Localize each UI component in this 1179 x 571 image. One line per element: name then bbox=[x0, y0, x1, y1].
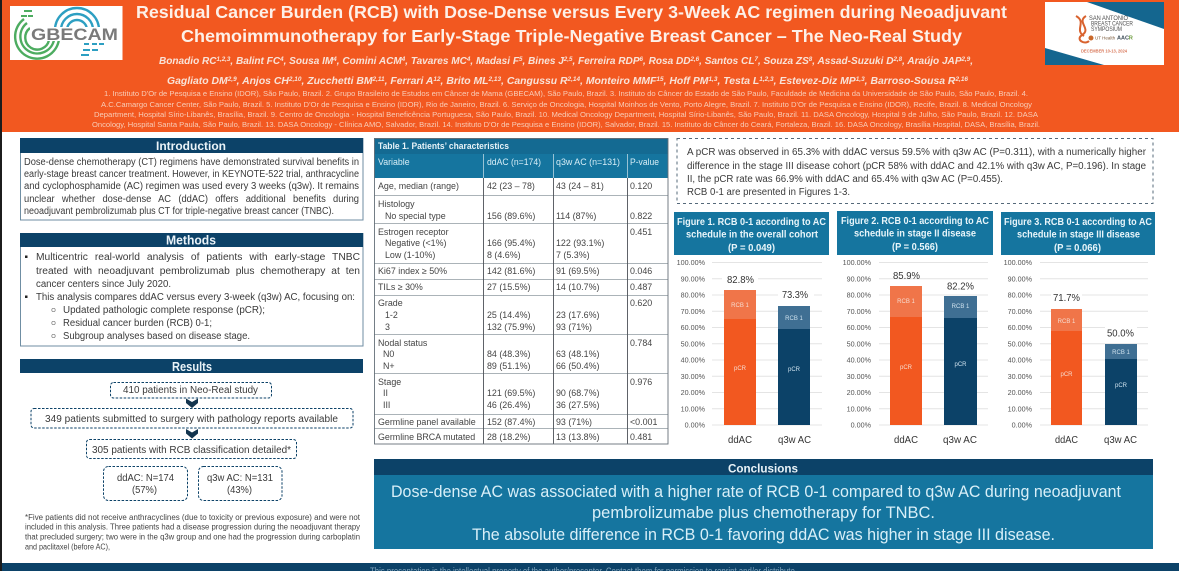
table body: Ki67 index ≥ 50% bbox=[378, 266, 447, 276]
y axis labels: 30.00% bbox=[847, 372, 872, 381]
figure 3 heading: (P = 0.066) bbox=[1054, 242, 1101, 254]
authors: 2,14 bbox=[567, 76, 580, 83]
bar: ddAC overall bbox=[722, 273, 758, 446]
y axis labels: 50.00% bbox=[681, 339, 706, 348]
table body: 43 (24 – 81) bbox=[556, 181, 604, 191]
authors: 2,9 bbox=[961, 56, 971, 63]
table body: 42 (23 – 78) bbox=[487, 181, 535, 191]
figure 3 heading bbox=[1001, 212, 1155, 255]
y axis labels: 40.00% bbox=[1008, 356, 1033, 364]
footer bar bbox=[2, 563, 1179, 571]
table body bbox=[378, 181, 657, 442]
figure 2 heading: (P = 0.566) bbox=[892, 241, 938, 253]
y axis labels: 100.00% bbox=[677, 258, 706, 267]
authors: 6 bbox=[640, 56, 643, 63]
panel: introduction bbox=[20, 138, 363, 220]
panel: conclusions bbox=[374, 459, 1153, 549]
bar: q3w AC stage III: RCB 1 bbox=[1112, 350, 1130, 356]
text block: introduction: unclear whether dose-dense AC (ddAC) offers additional benefits during bbox=[24, 194, 359, 205]
table body: 27 (15.5%) bbox=[487, 282, 530, 292]
bar: q3w AC stage III bbox=[1104, 327, 1137, 446]
table body: 7 (5.3%) bbox=[556, 250, 590, 260]
bar: q3w AC overall: pCR bbox=[788, 367, 801, 373]
y axis labels: 90.00% bbox=[681, 274, 706, 283]
arrow: chevron 1 bbox=[186, 398, 198, 408]
authors: 4 bbox=[466, 56, 471, 63]
flow box: ddAC bbox=[104, 466, 188, 500]
table body: 93 (71%) bbox=[556, 417, 592, 427]
y axis labels: 30.00% bbox=[1008, 372, 1033, 381]
flow box: 349 patients: 349 patients submitted to surgery with pathology reports available bbox=[45, 414, 338, 425]
y axis labels: 60.00% bbox=[1008, 323, 1033, 332]
affiliations bbox=[92, 89, 1040, 129]
bar: q3w AC stage II bbox=[943, 280, 977, 446]
table body: 91 (69.5%) bbox=[556, 266, 599, 276]
y axis labels: 100.00% bbox=[1004, 258, 1033, 267]
table body: 8 (4.6%) bbox=[487, 250, 521, 260]
panel: methods bbox=[20, 233, 363, 346]
table body: Stage bbox=[378, 377, 401, 387]
bar: q3w AC stage II: RCB 1 bbox=[952, 304, 970, 310]
bar: q3w AC stage II: pCR bbox=[954, 362, 967, 368]
authors: , bbox=[969, 55, 973, 67]
y axis labels: 90.00% bbox=[1008, 274, 1033, 283]
text block: methods list: treated with neoadjuvant pembrolizumab plus chemotherapy at ten bbox=[36, 266, 360, 277]
title: Residual Cancer Burden (RCB) with Dose-Dense versus Every 3-Week AC regimen during Neoadjuvant bbox=[136, 2, 1007, 22]
y axis labels: 100.00% bbox=[843, 258, 872, 267]
table body: Negative (<1%) bbox=[385, 238, 446, 248]
arrow: chevron 2 bbox=[186, 429, 198, 438]
logo: GBECAM bbox=[10, 6, 122, 60]
table body: 0.120 bbox=[630, 181, 652, 191]
table body: 36 (27.5%) bbox=[556, 400, 599, 410]
flow box: 349 patients bbox=[31, 408, 353, 428]
text block: introduction: Dose-dense chemotherapy (CT) regimens have demonstrated survival benefits in bbox=[24, 157, 359, 168]
flow box: q3w AC: (43%) bbox=[227, 485, 252, 496]
bar: ddAC overall: 82.8% bbox=[727, 274, 754, 286]
authors: 2,6 bbox=[690, 56, 700, 63]
table body: <0.001 bbox=[630, 417, 657, 427]
footnote: included in this analysis. Three patients had a disease progression during the neoadjuvant therapy bbox=[25, 522, 360, 532]
authors: 2,9 bbox=[227, 76, 237, 83]
bar: ddAC stage III bbox=[1051, 291, 1082, 446]
authors: , Madasi F bbox=[469, 55, 520, 67]
text block: methods list: Residual cancer burden (RCB) 0-1; bbox=[63, 318, 212, 329]
text block: conclusions: Dose-dense AC was associated with a higher rate of RCB 0-1 compared to q3w AC during neoadjuvant bbox=[391, 482, 1121, 501]
authors: , Comini ACM bbox=[336, 55, 402, 67]
table body: 1-2 bbox=[385, 310, 398, 320]
authors: , Anjos CH bbox=[236, 75, 289, 87]
table body: 13 (13.8%) bbox=[556, 432, 599, 442]
authors: , Brito ML bbox=[440, 75, 489, 87]
table body: 142 (81.6%) bbox=[487, 266, 535, 276]
y axis labels: 90.00% bbox=[847, 274, 872, 283]
y axis labels: 20.00% bbox=[1008, 388, 1033, 397]
authors: , Tavares MC bbox=[404, 55, 467, 67]
bar: ddAC stage III: 71.7% bbox=[1053, 292, 1080, 304]
y axis labels: 0.00% bbox=[685, 420, 706, 430]
authors: 4 bbox=[401, 56, 406, 63]
heading: introduction: Introduction bbox=[156, 139, 226, 153]
title: Chemoimmunotherapy for Early-Stage Triple-Negative Breast Cancer – The Neo-Real Study bbox=[181, 26, 962, 46]
flow box: 410 patients: 410 patients in Neo-Real study bbox=[123, 385, 258, 396]
table body: Grade bbox=[378, 298, 403, 308]
authors: 2,13 bbox=[488, 76, 501, 83]
authors: , Bines J bbox=[521, 55, 565, 67]
authors: , Estevez-Diz MP bbox=[773, 75, 857, 87]
y axis labels bbox=[1004, 258, 1033, 430]
text block: introduction: and cyclophosphamide (AC) regimen was used every 3 weeks (q3w). It remains bbox=[24, 181, 359, 192]
authors bbox=[159, 55, 973, 87]
table body: 0.487 bbox=[630, 282, 652, 292]
authors: , Sousa IM bbox=[283, 55, 334, 67]
table body: 93 (71%) bbox=[556, 322, 592, 332]
logo: San Antonio Breast Cancer Symposium: SYMPOSIUM bbox=[1091, 27, 1122, 33]
affiliations: Department, Hospital Sírio-Libanês, Brasília, Brazil. 9. Centro de Oncologia - Hospital Beneficência Portuguesa, São Paulo, Brazil. 10. Medical Oncology Department, Hospital Sírio-Libanês, São Paulo, Brazil. 11. DASA Oncology, Hospital 9 de Julho, São Paulo, Brazil. 12. DASA bbox=[94, 110, 1038, 119]
logo: San Antonio Breast Cancer Symposium: UT Health bbox=[1095, 36, 1116, 40]
logo: San Antonio Breast Cancer Symposium: BREAST CANCER bbox=[1091, 22, 1134, 28]
table body: 114 (87%) bbox=[556, 211, 596, 221]
text block: methods list: Subgroup analyses based on disease stage. bbox=[63, 331, 250, 342]
table body: Germline panel available bbox=[378, 417, 476, 427]
bar: ddAC stage II bbox=[890, 270, 922, 446]
y axis labels: 40.00% bbox=[681, 356, 706, 364]
footnote bbox=[25, 513, 361, 552]
authors: 4 bbox=[332, 56, 337, 63]
text block: introduction: early-stage breast cancer treatment. However, in KEYNOTE-522 trial, anthracycline bbox=[24, 169, 359, 180]
table header row: P-value bbox=[630, 157, 659, 167]
table body: III bbox=[383, 400, 390, 410]
y axis labels: 70.00% bbox=[681, 307, 706, 316]
table body: 0.784 bbox=[630, 338, 652, 348]
flow box: 410 patients bbox=[110, 382, 272, 398]
text block: pCR summary: A pCR was observed in 65.3% with ddAC versus 59.5% with q3w AC (P=0.311), with a numerically higher bbox=[687, 147, 1147, 158]
table body: 0.822 bbox=[630, 211, 652, 221]
heading: methods: Methods bbox=[166, 234, 216, 248]
authors: , Cangussu R bbox=[500, 75, 568, 87]
authors: , Monteiro MMF bbox=[579, 75, 657, 87]
y axis labels bbox=[843, 258, 872, 430]
flow box: 305 patients: 305 patients with RCB classification detailed* bbox=[92, 445, 291, 456]
table body: 0.976 bbox=[630, 377, 652, 387]
table body: 84 (48.3%) bbox=[487, 349, 530, 359]
authors: , Rosa DD bbox=[642, 55, 691, 67]
table body: 0.451 bbox=[630, 227, 652, 237]
table body: II bbox=[383, 388, 388, 398]
bar: q3w AC overall: RCB 1 bbox=[785, 316, 803, 322]
authors: 8 bbox=[809, 56, 813, 63]
text block: methods list: This analysis compares ddAC versus every 3-week (q3w) AC, focusing on: bbox=[36, 292, 355, 303]
text block: introduction: neoadjuvant pembrolizumab plus CT for triple-negative breast cancer (TNBC). bbox=[24, 206, 334, 217]
text block: pCR summary: difference in the stage III disease cohort (pCR 58% with ddAC and 42.1% with q3w AC, P=0.196). In stage bbox=[687, 161, 1146, 172]
y axis labels: 0.00% bbox=[851, 420, 872, 430]
authors: , Hoff PM bbox=[663, 75, 709, 87]
bar: q3w AC overall: 73.3% bbox=[782, 289, 808, 301]
text block: pCR summary: II, the pCR rate was 66.9% with ddAC and 65.4% with q3w AC (P=0.455). bbox=[687, 174, 1003, 185]
table body: 122 (93.1%) bbox=[556, 238, 604, 248]
table body: 0.481 bbox=[630, 432, 652, 442]
bar: q3w AC overall bbox=[778, 288, 814, 446]
table body: 156 (89.6%) bbox=[487, 211, 535, 221]
table body: 121 (69.5%) bbox=[487, 388, 535, 398]
authors: 2,5 bbox=[563, 56, 573, 63]
bar: ddAC stage II: ddAC bbox=[894, 434, 918, 446]
text block: methods list bbox=[25, 252, 360, 342]
table body: 0.620 bbox=[630, 298, 652, 308]
y axis labels: 40.00% bbox=[847, 356, 872, 364]
flow box: q3w AC: q3w AC: N=131 bbox=[207, 473, 273, 484]
authors: , Assad-Suzuki D bbox=[811, 55, 894, 67]
authors: , Ferreira RDP bbox=[572, 55, 640, 67]
bar: ddAC stage II: pCR bbox=[900, 365, 913, 371]
chart: figure 1 overall cohort bbox=[674, 212, 829, 446]
table body: 66 (50.4%) bbox=[556, 361, 599, 371]
table body: Age, median (range) bbox=[378, 181, 459, 191]
table body: 152 (87.4%) bbox=[487, 417, 535, 427]
affiliations: A.C.Camargo Cancer Center, São Paulo, Brazil. 5. Instituto D'Or de Pesquisa e Ensino (IDOR), Rio de Janeiro, Brazil. 6. Serviço de Oncologia, Hospital Moinhos de Vento, Porto Alegre, Brazil. 7. Instituto D'Or de Pesquisa e Ensino (IDOR), Recife, Brazil. 8. Medical Oncology bbox=[101, 100, 1032, 109]
y axis labels: 60.00% bbox=[847, 323, 872, 332]
panel: results bbox=[20, 359, 363, 552]
y axis labels: 50.00% bbox=[1008, 339, 1033, 348]
bar: q3w AC stage III: q3w AC bbox=[1104, 434, 1137, 446]
figure 1 heading: Figure 1. RCB 0-1 according to AC bbox=[677, 216, 826, 228]
bar: ddAC stage III: RCB 1 bbox=[1058, 319, 1076, 325]
logo: San Antonio Breast Cancer Symposium: AACR bbox=[1117, 36, 1133, 42]
panel: header banner bbox=[2, 0, 1179, 132]
y axis labels: 30.00% bbox=[681, 372, 706, 381]
authors: , Testa L bbox=[716, 75, 759, 87]
bar: q3w AC stage II: 82.2% bbox=[947, 280, 974, 292]
bar: q3w AC overall: q3w AC bbox=[778, 434, 811, 446]
logo: San Antonio Breast Cancer Symposium: DECEMBER 10-13, 2024 bbox=[1081, 48, 1127, 54]
y axis labels: 10.00% bbox=[681, 404, 706, 413]
table body: 89 (51.1%) bbox=[487, 361, 530, 371]
y axis labels: 70.00% bbox=[847, 307, 872, 316]
authors: 2,8 bbox=[893, 56, 902, 63]
y axis labels: 20.00% bbox=[681, 388, 706, 397]
table body: TILs ≥ 30% bbox=[378, 282, 423, 292]
bar: q3w AC stage III: 50.0% bbox=[1107, 328, 1134, 340]
text block: methods list: Multicentric real-world analysis of patients with early-stage TNBC bbox=[36, 252, 360, 263]
text block: conclusions: The absolute difference in RCB 0-1 favoring ddAC was higher in stage III disease. bbox=[472, 525, 1055, 544]
bar: ddAC stage II: 85.9% bbox=[893, 270, 920, 282]
text block: pCR summary: RCB 0-1 are presented in Figures 1-3. bbox=[687, 187, 850, 198]
table: patients' characteristics bbox=[374, 138, 668, 444]
flow box: ddAC: ddAC: N=174 bbox=[117, 473, 174, 484]
authors: 15 bbox=[656, 76, 664, 83]
table body: 14 (10.7%) bbox=[556, 282, 599, 292]
y axis labels: 80.00% bbox=[847, 290, 872, 300]
chart: figure 3 stage III bbox=[1001, 212, 1155, 446]
footnote: that precluded surgery; two were in the q3w group and one had the progression during carboplatin bbox=[25, 532, 360, 542]
table header row: ddAC (n=174) bbox=[487, 157, 541, 167]
table body: 63 (48.1%) bbox=[556, 349, 599, 359]
text block: introduction bbox=[24, 157, 359, 217]
footnote: *Five patients did not receive anthracyclines (due to toxicity or previous exposure) and were not bbox=[25, 513, 361, 522]
text block: methods list: cancer centers since July 2020. bbox=[36, 279, 171, 290]
y axis labels: 20.00% bbox=[847, 388, 872, 397]
table body: N0 bbox=[383, 349, 394, 359]
authors: , Araújo JAP bbox=[901, 55, 962, 67]
affiliations: Oncology, Hospital Santa Paula, São Paulo, Brazil. 13. DASA Oncology - Clínica AMO, Salvador, Brazil. 14. Instituto D'Or de Pesquisa e Ensino (IDOR), Salvador, Brazil. 15. Instituto do Câncer do Ceará, Fortaleza, Brazil. 16. DASA Oncology, Brasília Hospital, DASA, Brasília, Brazil. bbox=[92, 120, 1040, 129]
table title: Table 1. Patients’ characteristics bbox=[378, 141, 509, 151]
figure 2 heading: Figure 2. RCB 0-1 according to AC bbox=[841, 215, 989, 227]
bar: q3w AC stage II: q3w AC bbox=[943, 434, 977, 446]
text block: conclusions bbox=[391, 482, 1121, 544]
bar: ddAC overall: pCR bbox=[734, 366, 747, 372]
table header row bbox=[378, 157, 659, 167]
flow box: q3w AC bbox=[198, 466, 282, 500]
text block: pCR summary bbox=[677, 138, 1153, 204]
table body: 132 (75.9%) bbox=[487, 322, 535, 332]
figure 1 heading bbox=[674, 212, 829, 255]
authors: 2,16 bbox=[954, 76, 968, 83]
figure 1 heading: (P = 0.049) bbox=[728, 242, 775, 254]
table body: 28 (18.2%) bbox=[487, 432, 530, 442]
bar: ddAC stage II: RCB 1 bbox=[897, 299, 915, 305]
logo: San Antonio Breast Cancer Symposium: SAN ANTONIO bbox=[1089, 16, 1128, 22]
table body: Estrogen receptor bbox=[378, 227, 449, 237]
table header row: Variable bbox=[378, 157, 410, 167]
authors: 1,2,3 bbox=[759, 76, 774, 83]
table body: No special type bbox=[385, 211, 446, 221]
y axis labels: 50.00% bbox=[847, 339, 872, 348]
authors: 4 bbox=[279, 56, 284, 63]
authors: , Zucchetti BM bbox=[300, 75, 373, 87]
authors: 1,3 bbox=[856, 76, 865, 83]
authors: , Barroso-Sousa R bbox=[864, 75, 956, 87]
y axis labels: 70.00% bbox=[1008, 307, 1033, 316]
logo: San Antonio Breast Cancer Symposium bbox=[1045, 2, 1164, 65]
authors: 7 bbox=[754, 56, 758, 63]
authors: 12 bbox=[433, 76, 441, 83]
chart: figure 2 stage II bbox=[837, 211, 993, 446]
heading: results: Results bbox=[172, 360, 212, 374]
text block: conclusions: pembrolizumabe plus chemotherapy for TNBC. bbox=[592, 503, 935, 522]
authors: , Souza ZS bbox=[757, 55, 809, 67]
table body: 3 bbox=[385, 322, 390, 332]
heading: conclusions: Conclusions bbox=[728, 462, 798, 476]
authors: Bonadio RC bbox=[159, 55, 219, 67]
table body: 23 (17.6%) bbox=[556, 310, 599, 320]
authors: , Ferrari A bbox=[384, 75, 433, 87]
text block: methods list: Updated pathologic complete response (pCR); bbox=[63, 305, 265, 316]
figure 1 heading: schedule in the overall cohort bbox=[686, 228, 818, 240]
table body: Histology bbox=[378, 199, 415, 209]
figure 3 heading: Figure 3. RCB 0-1 according to AC bbox=[1004, 216, 1152, 228]
title bbox=[136, 2, 1007, 46]
flow box: ddAC: (57%) bbox=[132, 485, 157, 496]
figure 2 heading bbox=[837, 211, 993, 255]
y axis labels: 10.00% bbox=[847, 404, 872, 413]
bar: ddAC overall: RCB 1 bbox=[731, 303, 749, 309]
figure 2 heading: schedule in stage II disease bbox=[854, 228, 976, 240]
authors: Gagliato DM bbox=[167, 75, 228, 87]
table body: 166 (95.4%) bbox=[487, 238, 535, 248]
y axis labels bbox=[677, 258, 706, 430]
y axis labels: 80.00% bbox=[1008, 290, 1033, 300]
table body: 46 (26.4%) bbox=[487, 400, 530, 410]
authors: , Santos CL bbox=[698, 55, 754, 67]
y axis labels: 10.00% bbox=[1008, 404, 1033, 413]
authors: 1,2,3 bbox=[217, 56, 231, 63]
table body: Low (1-10%) bbox=[385, 250, 435, 260]
y axis labels: 0.00% bbox=[1012, 420, 1033, 430]
bar: ddAC stage III: ddAC bbox=[1055, 434, 1078, 446]
bar: ddAC overall: ddAC bbox=[728, 434, 752, 446]
y axis labels: 80.00% bbox=[681, 290, 706, 300]
authors: 2,11 bbox=[372, 76, 385, 83]
footnote: and paclitaxel (before AC), bbox=[25, 542, 110, 552]
authors: 1,3 bbox=[708, 76, 718, 83]
table body: Nodal status bbox=[378, 338, 428, 348]
authors: 2,10 bbox=[288, 76, 302, 83]
bar: ddAC stage III: pCR bbox=[1060, 372, 1073, 378]
table body: 90 (68.7%) bbox=[556, 388, 599, 398]
table body: Germline BRCA mutated bbox=[378, 432, 475, 442]
table body: N+ bbox=[383, 361, 395, 371]
logo: GBECAM: GBECAM bbox=[31, 25, 118, 44]
flow box: 305 patients bbox=[86, 440, 296, 458]
figure 3 heading: schedule in stage III disease bbox=[1017, 228, 1140, 240]
table body: 25 (14.4%) bbox=[487, 310, 530, 320]
authors: , Balint FC bbox=[229, 55, 280, 67]
authors: 5 bbox=[519, 56, 523, 63]
y axis labels: 60.00% bbox=[681, 323, 706, 332]
table body: 0.046 bbox=[630, 266, 652, 276]
table header row: q3w AC (n=131) bbox=[556, 157, 620, 167]
bar: q3w AC stage III: pCR bbox=[1115, 383, 1128, 389]
affiliations: 1. Instituto D'Or de Pesquisa e Ensino (IDOR), São Paulo, Brazil. 2. Grupo Brasileiro de Estudos em Câncer de Mama (GBECAM), São Paulo, Brazil. 3. Instituto do Câncer do Estado de São Paulo, Faculdade de Medicina da Universidade de São Paulo, São Paulo, Brazil. 4. bbox=[104, 89, 1028, 98]
